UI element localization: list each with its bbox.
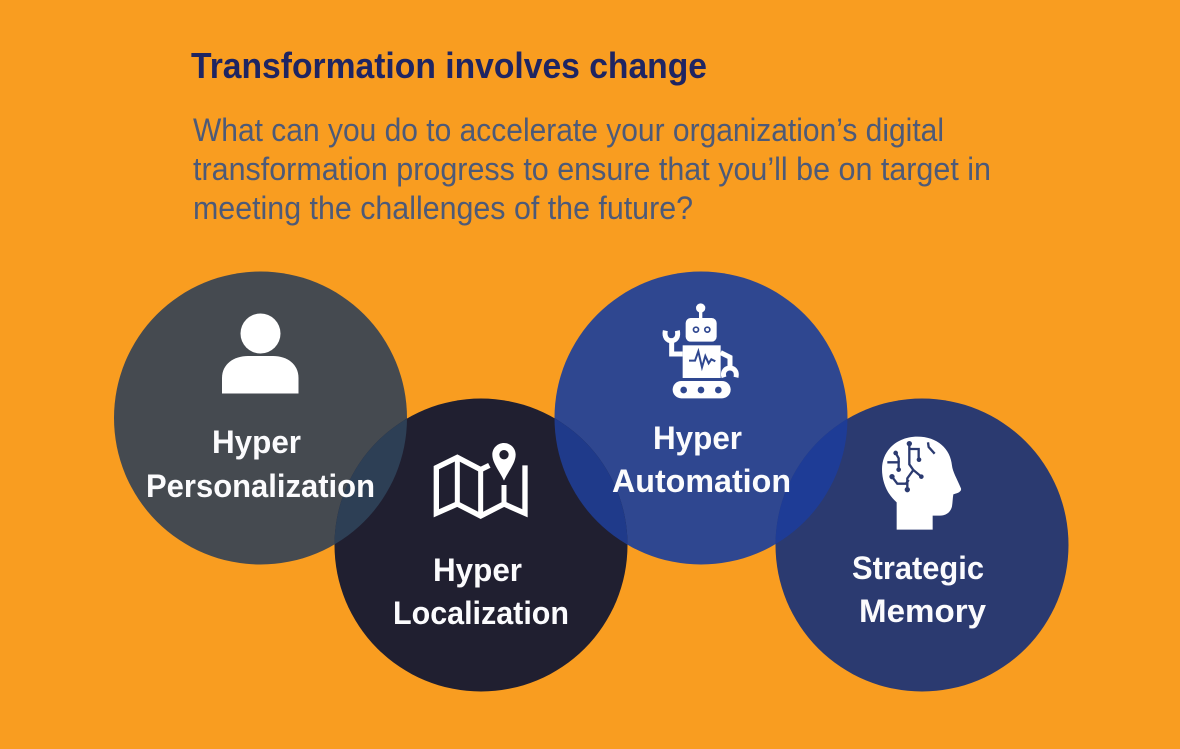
label: Hyper Personalization	[146, 424, 375, 504]
intro text block: What can you do to accelerate your organization’s digital	[193, 112, 944, 148]
intro text block: meeting the challenges of the future?	[193, 190, 693, 226]
label: Hyper Personalization: Hyper	[212, 424, 301, 460]
title: Transformation involves change	[191, 45, 707, 86]
icon: map with pin	[436, 443, 525, 516]
label: Strategic Memory	[852, 550, 986, 629]
label: Strategic Memory: Strategic	[852, 550, 984, 586]
label: Hyper Automation	[612, 420, 791, 499]
label: Hyper Localization	[393, 552, 569, 631]
label: Hyper Automation: Automation	[612, 463, 791, 499]
icon: robot	[665, 303, 736, 398]
panel: circle cluster	[114, 272, 1068, 692]
icon: brain head	[882, 437, 961, 530]
label: Hyper Personalization: Personalization	[146, 468, 375, 504]
icon: person	[222, 314, 298, 394]
label: Hyper Localization: Localization	[393, 595, 569, 631]
intro text block	[193, 112, 991, 226]
label: Hyper Automation: Hyper	[653, 420, 742, 456]
label: Strategic Memory: Memory	[859, 593, 986, 629]
label: Hyper Localization: Hyper	[433, 552, 522, 588]
intro text block: transformation progress to ensure that you’ll be on target in	[193, 151, 991, 187]
